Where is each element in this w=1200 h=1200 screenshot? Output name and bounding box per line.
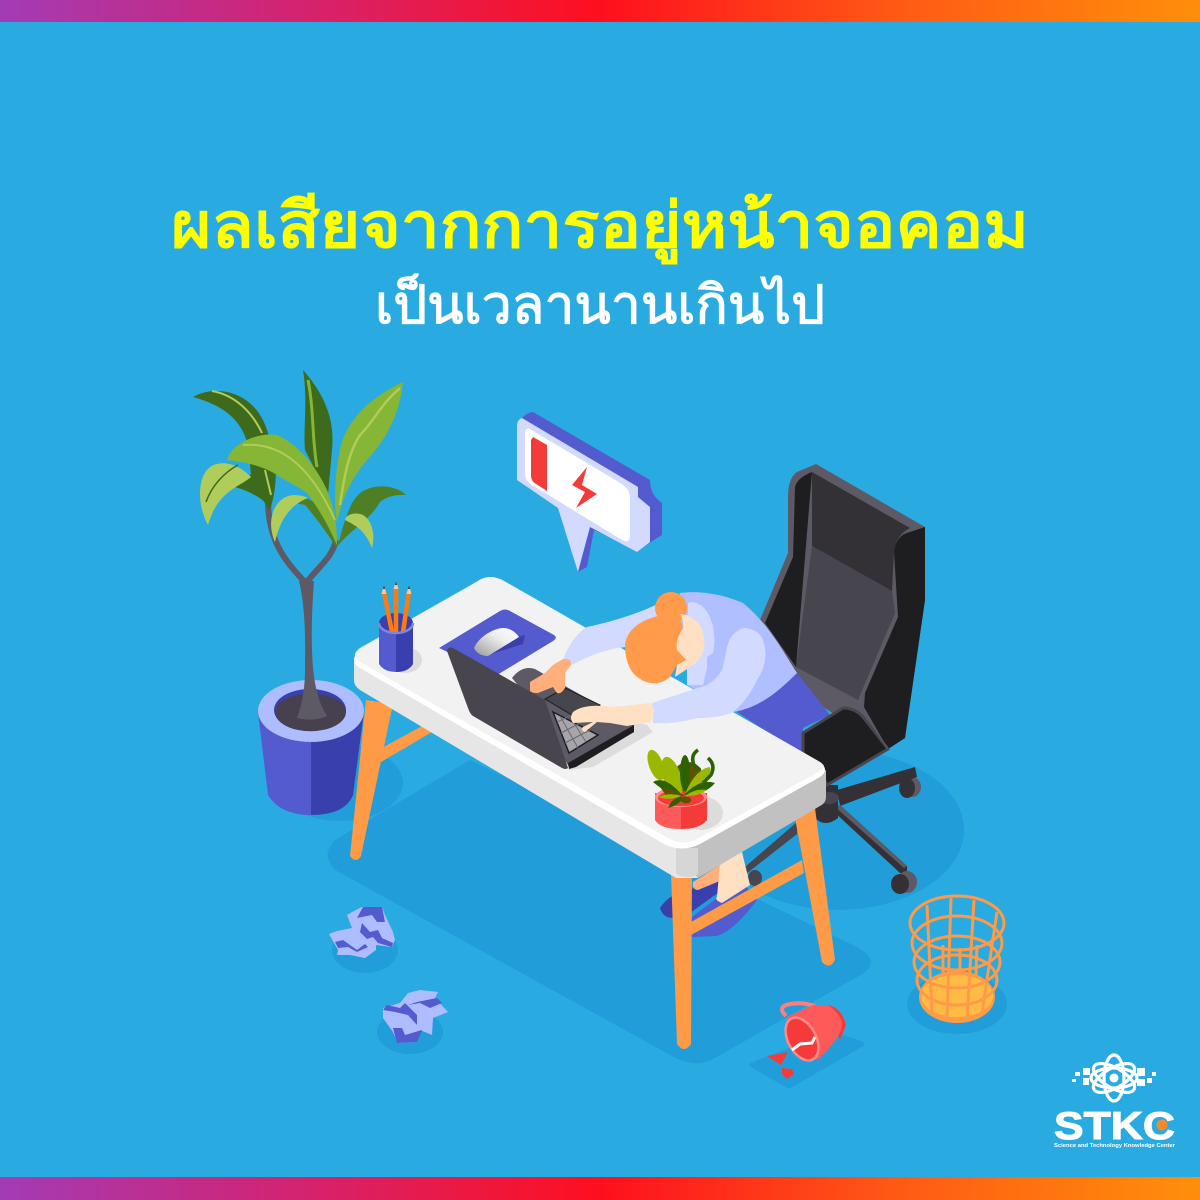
plant (193, 370, 406, 720)
leaf lower center dark (295, 495, 337, 548)
laptop base (512, 668, 634, 767)
back and torso (670, 592, 797, 712)
cup handle (782, 1003, 815, 1016)
desk corner (676, 848, 698, 877)
bottom gradient bar (0, 1177, 1200, 1200)
chair lower back (796, 546, 895, 700)
hair (625, 592, 687, 683)
wordmark: STKC (1054, 1105, 1175, 1148)
atom nucleus (1110, 1074, 1118, 1082)
leaf back left (193, 391, 276, 510)
data squares (1072, 1068, 1156, 1086)
leaf small right (345, 513, 373, 548)
mouse pad (439, 610, 556, 675)
chair left panel (765, 472, 812, 667)
cup body (787, 1005, 842, 1060)
STKC logo (1054, 1055, 1176, 1149)
basket shadow (907, 974, 1007, 1034)
collar (687, 602, 714, 685)
leaf left dark stripe (235, 460, 268, 505)
battery level (531, 437, 547, 491)
right hand (571, 703, 654, 732)
chair (745, 464, 925, 894)
cup shadow (752, 1034, 862, 1086)
laptop (447, 647, 653, 770)
heading line 1: ผลเสียจากการอยู่หน้าจอคอม (171, 191, 1029, 265)
mouse (474, 628, 525, 656)
top gradient bar (0, 0, 1200, 22)
table front strut (691, 860, 804, 935)
pen holder (379, 581, 422, 673)
table left strut (378, 725, 432, 762)
atom icon (1089, 1055, 1139, 1101)
desk (354, 577, 826, 878)
crumpled paper 2 (383, 990, 448, 1043)
paper shadow 2 (377, 1010, 443, 1054)
chair upper back (812, 472, 910, 591)
paper shadow 1 (332, 927, 398, 973)
battery speech bubble (517, 412, 662, 572)
pencils (382, 581, 412, 632)
skirt (737, 673, 830, 755)
title (171, 191, 1029, 335)
leaf back right (335, 382, 403, 522)
lightning bolt (572, 467, 597, 508)
leaf back center (303, 370, 333, 495)
desk right face (676, 770, 826, 878)
trunk (297, 581, 327, 720)
red pot (655, 793, 681, 829)
chair base (745, 767, 921, 894)
table front leg (671, 873, 692, 1049)
leaves (644, 748, 715, 808)
crack (792, 1037, 815, 1050)
table right leg (795, 808, 835, 966)
chair shadow (712, 750, 964, 910)
basket fill (919, 971, 995, 1023)
leaf big center (227, 434, 337, 545)
keyboard (553, 712, 598, 753)
leaf lower center (271, 495, 308, 542)
desk shadow (328, 760, 871, 1063)
heading line 2: เป็นเวลานานเกินไป (375, 273, 825, 335)
logo dot (1156, 1120, 1168, 1130)
desk left face (354, 660, 698, 878)
bubble front (517, 418, 650, 572)
left hand (530, 659, 571, 693)
laptop lid (447, 647, 568, 769)
desk top surface (355, 577, 824, 843)
pot shadow (277, 745, 403, 821)
leaf right dark (338, 486, 406, 546)
floor shadows (277, 745, 1007, 1086)
left arm (563, 603, 668, 665)
table left leg (350, 700, 393, 860)
bubble side (522, 412, 662, 572)
right arm (652, 628, 765, 723)
chair seat (803, 708, 888, 785)
basket wire (910, 896, 1004, 1020)
cup opening (779, 1012, 825, 1066)
branches (268, 500, 336, 583)
shards (767, 1052, 794, 1079)
plant pot (258, 680, 364, 815)
trackpad (545, 688, 600, 718)
person (530, 592, 797, 732)
broken red cup (767, 1003, 846, 1079)
face (675, 614, 704, 677)
legs and feet (350, 700, 835, 1049)
desk plant (644, 748, 723, 830)
desk stripe (354, 577, 825, 848)
cup body edge (828, 1005, 846, 1040)
leaf left (200, 463, 251, 525)
chair right panel (864, 527, 925, 749)
chair frame (760, 464, 925, 749)
feet (660, 852, 757, 937)
battery body (525, 429, 630, 541)
tagline: Science and Technology Knowledge Center (1054, 1143, 1176, 1149)
wastebasket (910, 896, 1004, 1023)
laptop shadow (568, 710, 653, 770)
crumpled paper 1 (329, 907, 395, 958)
